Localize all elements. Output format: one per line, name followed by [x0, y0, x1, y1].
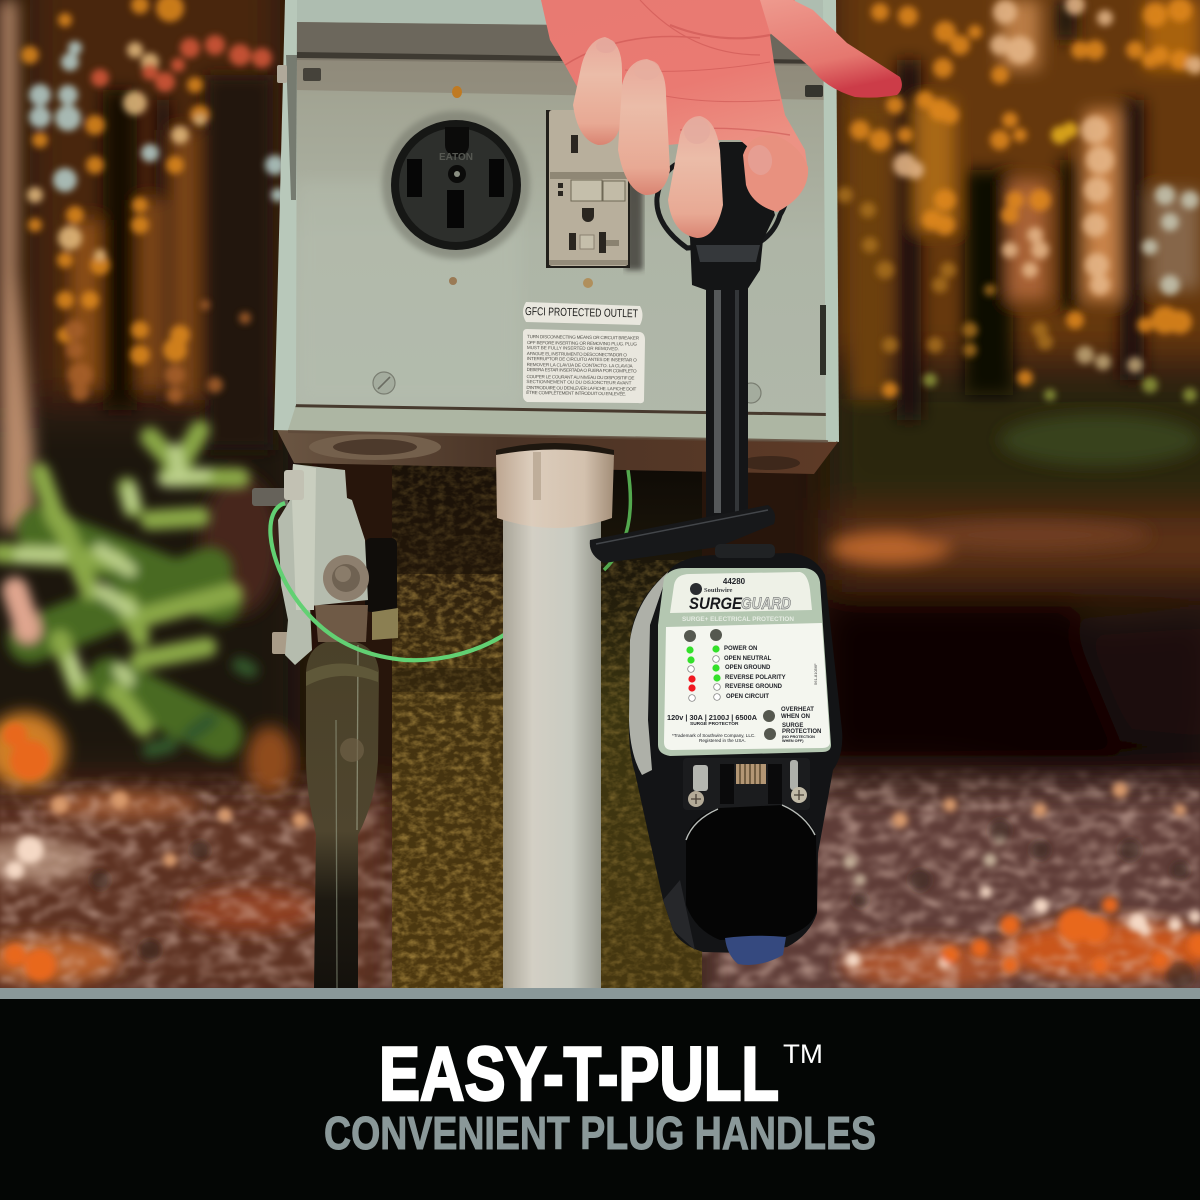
label: GFCI protected outlet: GFCI PROTECTED OUTLET: [525, 306, 638, 320]
ratings: Registered in the USA.: [699, 738, 746, 743]
label: warning text: ÊTRE COMPLÈTEMENT INTRODUIT OU ENLEVÉE.: [526, 388, 626, 396]
bokeh highlights, left forest: [21, 0, 285, 403]
PVC collar: [496, 443, 614, 528]
icon: 50A round receptacle: EATON: [439, 152, 473, 163]
status indicators: [763, 707, 821, 743]
label: warning text: REMOVER LA CLAVIJA DE CONTACTO. LA CLAVIJA: [527, 362, 634, 369]
conduit pipe: [306, 640, 379, 988]
ratings: *Trademark of Southwire Company, LLC.: [672, 733, 756, 738]
status indicators: WHEN ON: [781, 714, 810, 720]
label: warning text: APAGUE EL INSTRUMENTO DESCONECTADOR O: [527, 351, 627, 357]
housing: [629, 553, 842, 953]
device faceplate: 561-81056F: [813, 663, 818, 685]
label: warning text: TURN DISCONNECTING MEANS OR CIRCUIT BREAKER: [527, 334, 640, 341]
texture of leaf litter: [0, 770, 400, 990]
box lid top: [292, 0, 834, 28]
icon: green bush: [0, 430, 250, 750]
indicator labels: [724, 646, 786, 700]
label: warning text: DEBERA ESTAR INSERTADA O FUERA POR COMPLETO: [527, 367, 637, 374]
palm: [541, 0, 808, 175]
hand pulling plug: [541, 0, 902, 238]
indicator labels: OPEN CIRCUIT: [726, 694, 769, 700]
ratings: 120v | 30A | 2100J | 6500A: [667, 715, 757, 722]
logo and model: [682, 577, 794, 623]
icon: 50A round receptacle: [382, 111, 530, 259]
floor glow: [1000, 920, 1200, 980]
label: warning text: MUST BE FULLY INSERTED OR REMOVED.: [527, 345, 619, 351]
status indicators: SURGE: [782, 723, 803, 729]
indicator labels: OPEN GROUND: [725, 665, 771, 671]
wooden post: [392, 464, 702, 990]
trunks: [0, 0, 34, 530]
label: GFCI protected outlet: [523, 302, 642, 325]
status indicators: OVERHEAT: [781, 707, 814, 713]
box underside: [277, 430, 838, 474]
title: TM: [783, 1039, 823, 1069]
palm creases: [565, 0, 790, 135]
label: warning text: [523, 329, 645, 403]
black banner: [0, 999, 1200, 1200]
surge protector: [629, 544, 842, 965]
green ground wire: [270, 503, 504, 660]
white PVC pipe: [503, 520, 601, 990]
plug flange: [590, 505, 775, 563]
label: warning text: INTERRUPTOR DE CIRCUITO ANTES DE INSERTAR O: [527, 356, 637, 363]
dark hollow behind surge protector: [820, 598, 1200, 785]
title: EASY-T-PULL: [379, 1032, 779, 1117]
subtitle: CONVENIENT PLUG HANDLES: [324, 1107, 876, 1159]
socket ring behind plug: [657, 165, 788, 248]
status indicators: PROTECTION: [782, 729, 821, 735]
indicator LEDs: [684, 629, 722, 701]
pinky finger: [743, 135, 808, 212]
grounding wire back section: [604, 470, 630, 570]
indicator labels: POWER ON: [724, 646, 757, 652]
label: warning text: COUPER LE COURANT AU NIVEAU DU DISPOSITIF DE: [526, 374, 635, 381]
label: warning text: SECTIONNEMENT OU DU DISJONCTEUR AVANT: [526, 379, 632, 385]
glowing columns: [70, 220, 100, 390]
box lower lip: [275, 405, 836, 442]
label: warning text: D'INTRODUIRE OU D'ENLEVER LA FICHE. LA FICHE DOIT: [526, 385, 637, 392]
indicator labels: REVERSE GROUND: [725, 684, 783, 690]
middle finger: [618, 59, 670, 195]
index finger: [573, 37, 622, 145]
ratings: [667, 715, 757, 743]
blue tab: [725, 936, 786, 965]
device faceplate: [658, 568, 831, 756]
logo and model: 44280: [723, 577, 746, 586]
ratings: SURGE PROTECTOR: [690, 721, 739, 727]
spring hinge: [683, 758, 810, 810]
indicator labels: REVERSE POLARITY: [725, 675, 786, 681]
logo and model: SURGE+ ELECTRICAL PROTECTION: [682, 616, 794, 623]
indicator labels: OPEN NEUTRAL: [724, 656, 772, 662]
logo and model: GUARD: [741, 595, 791, 613]
ring finger: [668, 116, 723, 238]
box screws: [373, 86, 761, 403]
socket cover: [686, 805, 817, 940]
status indicators: WHEN OFF): [782, 739, 804, 743]
front face: [275, 0, 836, 442]
box side edges: [274, 0, 297, 430]
logo and model: Southwire: [704, 587, 733, 594]
banner stripe: [0, 988, 1200, 999]
plug cord and strain relief: [672, 142, 775, 520]
logo and model: SURGE: [689, 595, 743, 613]
fallen-leaf highlights: [3, 723, 1200, 989]
bokeh highlights, right forest: [837, 0, 1200, 402]
icon: GFCI outlet: [546, 110, 643, 270]
meter bracket: [252, 464, 398, 665]
label: warning text: OFF BEFORE INSERTING OR REMOVING PLUG. PLUG: [527, 340, 637, 347]
status indicators: (NO PROTECTION: [782, 735, 815, 739]
electrical pedestal box: [274, 0, 839, 528]
thumb: [760, 0, 902, 98]
